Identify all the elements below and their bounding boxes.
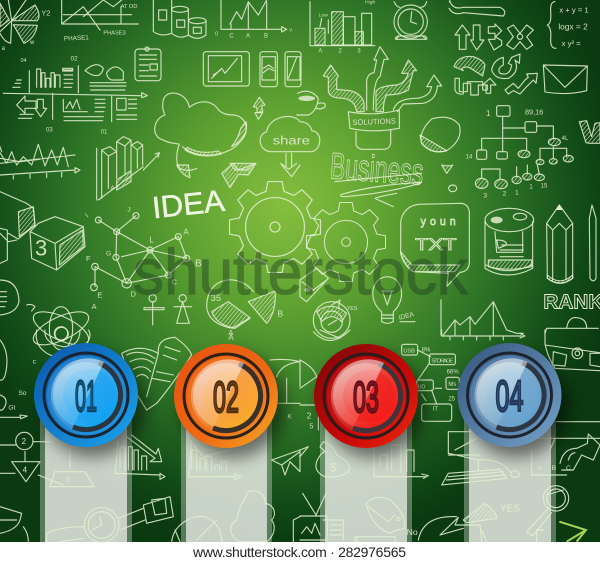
icon: book <box>122 337 192 410</box>
diagram: flow 01: 2 <box>22 437 27 446</box>
icon: disk <box>420 117 460 152</box>
icon: large cloud <box>155 93 255 170</box>
icon: right chart card: C <box>566 465 571 472</box>
chart: hatched bars: Low <box>319 13 328 19</box>
diagram: timeline: 03 <box>46 127 53 133</box>
icon: right chart card: B <box>552 465 557 472</box>
chart: pie yes <box>407 503 520 542</box>
icon: envelope small <box>300 268 328 302</box>
chart: pie 35: A <box>228 328 233 337</box>
icon: pie sketch: Y2 <box>41 8 50 17</box>
chart: line peaks: B <box>264 33 268 39</box>
icon: math formulas: x y² = <box>562 39 581 48</box>
chart: phases: PHASE1 <box>64 34 90 43</box>
icon: share cloud: share <box>273 133 310 147</box>
chart: hatched bars: A <box>318 49 322 55</box>
icon: watch <box>47 497 173 542</box>
icon: money bag: $ <box>330 461 337 475</box>
chart: bars arrow 02 <box>188 440 241 480</box>
diagram: storage network: 25 <box>448 397 456 403</box>
icon: math formulas <box>547 2 589 48</box>
icon: math formulas: logx = 2 <box>558 21 588 31</box>
chart: wave axis <box>0 168 80 179</box>
icon: light bulb: IDEA <box>398 311 415 322</box>
icon: plane and book fragment <box>300 330 350 457</box>
icon: arrows set <box>455 24 533 50</box>
icon: solutions box with arrows <box>323 47 442 149</box>
icon: cubes <box>0 192 85 270</box>
diagram: org chart: 89,16 <box>525 107 543 116</box>
text: RANK: RANK <box>543 291 600 313</box>
icon: right edge items: K <box>287 413 292 420</box>
chart: line peaks <box>215 0 292 39</box>
watermark: shutterstock: shutterstock <box>133 236 469 308</box>
icon: right edge items: A <box>228 333 234 342</box>
icon: cubes: 3 <box>35 236 47 261</box>
icon: gear right <box>306 202 386 282</box>
diagram: network nodes <box>84 207 202 311</box>
diagram: flow 01 <box>0 432 94 487</box>
diagram: storage network: UD <box>417 384 426 390</box>
icon: tablet and phones <box>203 52 301 87</box>
diagram: storage network: Ms <box>448 382 456 388</box>
diagram: timeline: 04 <box>21 58 27 64</box>
icon: solutions box with arrows: SOLUTIONS <box>352 116 396 127</box>
icon: speech bubble <box>401 203 469 287</box>
chart: pie yes: No <box>407 527 418 537</box>
chart: bars 03 <box>374 443 428 478</box>
icon: spiral <box>313 300 350 338</box>
icon: bag <box>545 318 598 333</box>
chart: waves <box>0 144 75 167</box>
chart: 3d towers <box>97 137 159 200</box>
chart: 3d towers: A <box>111 185 115 191</box>
number 02: 02 <box>213 373 239 422</box>
icon: blobs: 2 <box>503 191 507 198</box>
number 03: 03 <box>353 373 379 422</box>
icon: computer and keyboard <box>442 432 519 485</box>
icon: left fragments: So <box>18 390 27 397</box>
icon: pencils <box>547 205 596 283</box>
chart: phases: AT OD <box>121 4 137 10</box>
icon: money bag <box>316 442 349 477</box>
diagram: network nodes: B <box>195 259 202 270</box>
icon: letter W <box>579 121 600 143</box>
icon: wrench <box>449 0 505 16</box>
icon: share cloud <box>260 116 320 169</box>
diagram: org chart: 1 <box>486 109 491 118</box>
icon: blobs: 15 <box>541 184 548 190</box>
chart: pie 35: B <box>277 309 283 319</box>
icon: pie sketch: a <box>2 46 6 52</box>
badge: 04 <box>458 343 568 457</box>
chart: mountain <box>441 300 523 335</box>
icon: underline squiggle <box>335 173 422 207</box>
icon: small arrows <box>253 97 265 119</box>
doodles: middle right <box>300 165 600 338</box>
icon: right chart card <box>532 434 600 475</box>
icon: speech bubble: TXT <box>415 235 457 254</box>
icon: mouse <box>357 497 405 542</box>
diagram: timeline: 01 <box>101 129 108 135</box>
icon: curved arrows <box>454 54 537 95</box>
diagram: network nodes: A <box>183 227 189 236</box>
diagram: timeline: 02 <box>71 56 78 63</box>
chart: hatched bars <box>310 0 375 55</box>
icon: magnifier <box>527 486 569 536</box>
badge: 02 <box>174 344 285 458</box>
diagram: network nodes: J <box>127 207 131 214</box>
diagram: network nodes: I <box>84 213 90 219</box>
icon: bottom fragments <box>177 165 300 178</box>
diagram: network nodes: L <box>149 235 154 244</box>
chart: hatched bars: 2 <box>338 49 342 55</box>
badge: 01: 01 <box>75 372 97 421</box>
icon: right chart card: A <box>537 465 542 472</box>
icon: tv <box>300 493 343 540</box>
icon: left bottom <box>0 507 28 542</box>
badge: 03 <box>314 344 425 458</box>
doodles: top left <box>0 0 320 200</box>
icon: can <box>485 208 534 275</box>
diagram: network nodes: D <box>131 290 136 299</box>
icon: light bulb <box>347 277 415 323</box>
icon: left fragments: Gt <box>8 404 16 411</box>
icon: right edge items <box>228 333 300 542</box>
icon: plane and book fragment: 2 <box>307 410 312 420</box>
chart: axis dots <box>442 330 525 340</box>
doodles: bottom left <box>0 327 300 542</box>
icon: atom lower <box>33 327 90 365</box>
diagram: storage network <box>402 344 459 421</box>
diagram: storage network: STORAGE <box>431 358 454 364</box>
icon: plane and book fragment: 5 <box>309 421 313 430</box>
diagram: network nodes: G <box>106 251 111 258</box>
chart: pie yes: YES <box>500 504 520 515</box>
diagram: storage network: 8% <box>422 347 431 353</box>
badge: 01 <box>34 343 145 457</box>
icon: gear left <box>230 182 320 272</box>
icon: hatched arrow <box>222 163 256 188</box>
diagram: org chart <box>466 106 573 165</box>
chart: pie 35: 35 <box>211 293 221 303</box>
chart: pie 35 <box>207 280 283 337</box>
icon: blobs <box>442 165 548 200</box>
icon: cylinders <box>153 0 206 38</box>
chart: 3d towers: C <box>126 178 130 184</box>
icon: light bulb: YES <box>347 306 358 312</box>
chart: line peaks: v <box>289 28 292 34</box>
chart: bars arrow 01 <box>115 435 165 479</box>
icon: blobs: 1 <box>515 189 519 196</box>
icon: stick figures <box>144 295 192 325</box>
diagram: network nodes: E <box>97 291 102 300</box>
chart: phases <box>62 0 138 43</box>
icon: coffee cup <box>297 91 325 115</box>
icon: blobs: 3 <box>483 193 487 200</box>
chart: phases: PHASE3 <box>103 30 126 36</box>
chart: line peaks: A <box>246 33 250 39</box>
icon: paper plane <box>272 450 300 475</box>
icon: pie sketch <box>0 0 50 52</box>
number 04: 04 <box>495 372 524 421</box>
icon: speech bubble: youn <box>421 216 456 228</box>
diagram: org chart: 14 <box>466 154 473 160</box>
diagram: network nodes: C <box>172 277 178 286</box>
diagram: storage network: 66% <box>447 369 459 375</box>
icon: envelope <box>543 65 587 94</box>
doodles: middle left <box>0 163 300 352</box>
heading: IDEA: IDEA <box>151 184 227 225</box>
diagram: storage network: IT <box>433 407 438 413</box>
icon: left fragments <box>0 340 27 419</box>
icon: briefcase <box>545 330 600 422</box>
panel: vertical strips <box>40 420 556 542</box>
icon: blobs: 1 <box>529 184 533 190</box>
icon: bottom edge <box>355 530 543 542</box>
diagram: timeline <box>3 56 147 135</box>
diagram: network nodes: A <box>92 302 97 311</box>
diagram: storage network: USB <box>403 348 415 354</box>
diagram: org chart: 4L <box>562 136 569 142</box>
icon: clipboard <box>135 47 161 81</box>
diagram: flow 01: S <box>65 476 70 485</box>
icon: atom lower: c <box>33 358 37 365</box>
icon: alarm clock <box>394 2 427 39</box>
chart: line peaks: 0 <box>215 31 218 37</box>
doodles: top right <box>297 0 600 193</box>
footer: source text: www.shutterstock.com · 282976565 <box>192 544 406 560</box>
diagram: network nodes: F <box>86 254 91 263</box>
icon: atom and list circle <box>0 280 93 352</box>
diagram: flow 01: 4 <box>23 466 28 475</box>
doodles: bottom right <box>300 330 600 542</box>
icon: pie sketch: w <box>29 40 35 46</box>
icon: cloud and globe <box>172 491 274 542</box>
icon: green bright arrow <box>559 522 586 542</box>
chart: hatched bars: 3 <box>357 49 361 55</box>
title: Business: Business <box>329 144 425 193</box>
icon: math formulas: x + y = 1 <box>559 6 589 15</box>
chart: line peaks: C <box>229 33 234 39</box>
